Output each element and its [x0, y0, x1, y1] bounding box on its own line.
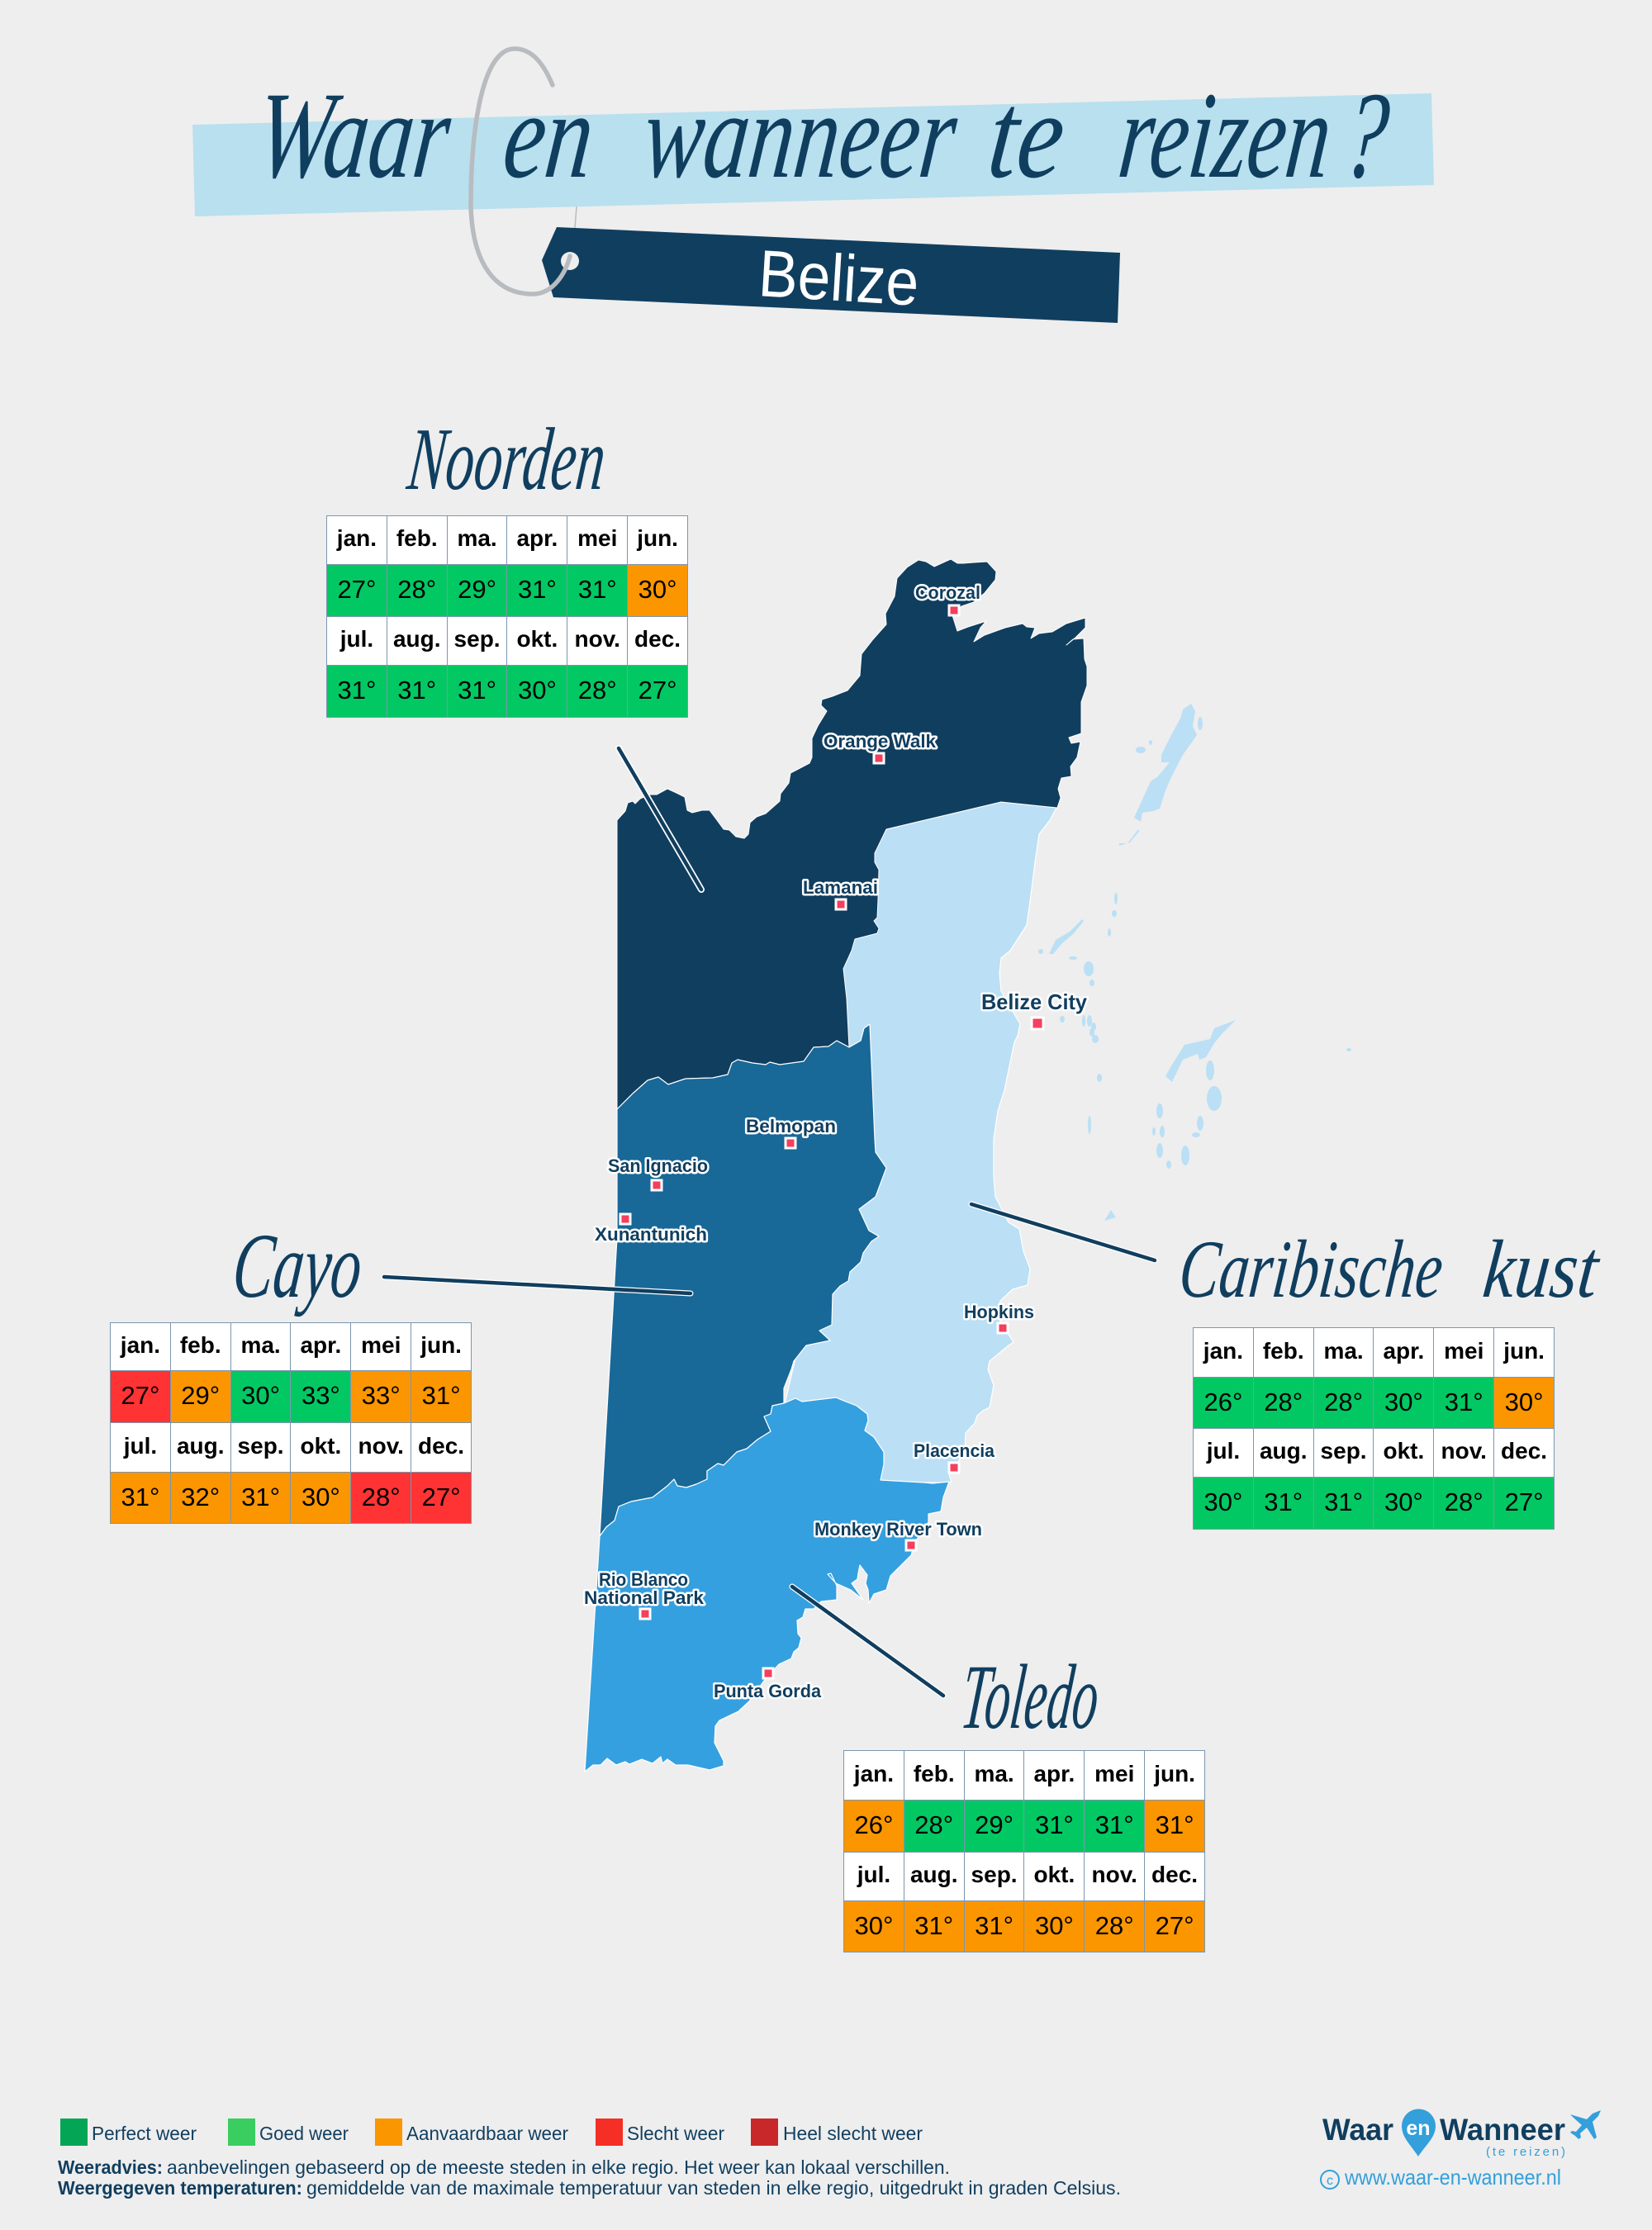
- table: Caribische kust: mei: [1444, 1338, 1483, 1363]
- table: Toledo: ma.: [974, 1761, 1014, 1786]
- table: Caribische kust: sep.: [1321, 1438, 1367, 1464]
- table: Toledo: jun.: [1154, 1761, 1195, 1786]
- table: Toledo: 27°: [1156, 1911, 1194, 1939]
- city: Monkey River Town: Monkey River Town: [814, 1519, 982, 1540]
- table: Caribische kust: 30°: [1384, 1388, 1423, 1416]
- table: Toledo: aug.: [910, 1862, 958, 1887]
- table: Toledo: 30°: [1035, 1911, 1074, 1939]
- table: Cayo: 29°: [181, 1381, 220, 1410]
- table: Noorden: jun.: [637, 525, 678, 551]
- table: Noorden: 27°: [337, 575, 376, 604]
- city: Lamanai: Lamanai: [803, 877, 878, 898]
- logo: Waar en Wanneer: en: [1406, 2117, 1431, 2140]
- city: San Ignacio: [608, 1155, 708, 1190]
- note: weeradvies: Weeradvies:: [58, 2156, 163, 2178]
- city: Orange Walk: Orange Walk: [824, 731, 937, 752]
- city: Corozal: Corozal: [915, 582, 980, 603]
- table: Noorden: okt.: [517, 626, 558, 652]
- table: Noorden: 30°: [518, 676, 557, 705]
- table: Caribische kust: 30°: [1384, 1487, 1423, 1516]
- table: Caribische kust: 30°: [1505, 1388, 1544, 1416]
- pointer: Caribische kust: [971, 1204, 1155, 1260]
- heading: Caribische kust: kust: [1479, 1223, 1604, 1315]
- table: Noorden: nov.: [574, 626, 620, 652]
- city: Xunantunich: [595, 1214, 707, 1245]
- heading: Toledo: Toledo: [957, 1646, 1104, 1748]
- table: Cayo: nov.: [358, 1432, 404, 1459]
- city: Belize City: Belize City: [981, 989, 1088, 1014]
- table: Noorden: aug.: [393, 626, 441, 652]
- table: Cayo: 27°: [422, 1482, 461, 1511]
- heading: Cayo: Cayo: [228, 1215, 367, 1317]
- table: Noorden: 31°: [337, 676, 376, 705]
- table: Cayo: jul.: [124, 1432, 157, 1459]
- city: Corozal: [915, 582, 980, 615]
- table: Cayo: 33°: [362, 1381, 401, 1410]
- table: Noorden: 27°: [638, 676, 677, 705]
- table: Noorden: ma.: [457, 525, 497, 551]
- title: Waar: [251, 66, 457, 204]
- table: Cayo: 28°: [362, 1482, 401, 1511]
- logo: Waar en Wanneer: (te reizen): [1486, 2145, 1565, 2159]
- table: Noorden: 31°: [458, 676, 496, 705]
- table: Caribische kust: 28°: [1264, 1388, 1303, 1416]
- table: Cayo: ma.: [240, 1331, 281, 1358]
- table: Toledo: dec.: [1151, 1862, 1198, 1887]
- pointer: Toledo: [792, 1587, 943, 1696]
- legend: [60, 2118, 923, 2146]
- table: Cayo: apr.: [300, 1331, 341, 1358]
- thin tag string: [575, 206, 577, 228]
- table: Noorden: 31°: [578, 575, 617, 604]
- legend: Slecht weer: [627, 2123, 724, 2144]
- table: Noorden: 31°: [397, 676, 436, 705]
- table: Caribische kust: apr.: [1383, 1338, 1424, 1363]
- table: Noorden: 31°: [518, 575, 557, 604]
- city: San Ignacio: San Ignacio: [608, 1155, 708, 1176]
- table: Cayo: 31°: [121, 1482, 159, 1511]
- table: Toledo: [843, 1750, 1205, 1952]
- table: Cayo: okt.: [301, 1432, 341, 1459]
- title: ?: [1338, 66, 1395, 204]
- table: Noorden: 28°: [397, 575, 436, 604]
- city: Placencia: [914, 1440, 995, 1473]
- table: Cayo: aug.: [177, 1432, 225, 1459]
- table: Caribische kust: 28°: [1324, 1388, 1363, 1416]
- logo: Waar en Wanneer: Waar: [1322, 2113, 1393, 2147]
- logo: Waar en Wanneer: [1322, 2109, 1601, 2159]
- table: Cayo: 27°: [121, 1381, 159, 1410]
- city: Monkey River Town: [814, 1519, 982, 1550]
- table: Cayo: 31°: [422, 1381, 461, 1410]
- table: Caribische kust: jun.: [1503, 1338, 1545, 1363]
- city: Punta Gorda: [714, 1668, 822, 1701]
- table: Toledo: feb.: [914, 1761, 955, 1786]
- table: Caribische kust: okt.: [1383, 1438, 1424, 1464]
- table: Toledo: 29°: [975, 1810, 1014, 1839]
- map: Caribische kust region: [785, 802, 1056, 1483]
- table: Toledo: mei: [1094, 1761, 1134, 1786]
- table: Toledo: 31°: [975, 1911, 1014, 1939]
- table: Noorden: 29°: [458, 575, 496, 604]
- city: Belize City: [981, 989, 1088, 1029]
- table: Toledo: okt.: [1034, 1862, 1075, 1887]
- table: Caribische kust: jul.: [1207, 1438, 1240, 1464]
- city: Rio Blanco National Park: National Park: [584, 1587, 705, 1608]
- table: Caribische kust: 27°: [1505, 1487, 1544, 1516]
- table: Noorden: apr.: [516, 525, 558, 551]
- table: Caribische kust: ma.: [1323, 1338, 1364, 1363]
- map: cayes and islands: [1038, 704, 1351, 1221]
- title: reizen: [1113, 66, 1338, 204]
- tag: Belize: [542, 227, 1120, 323]
- table: Cayo: 33°: [301, 1381, 340, 1410]
- map: Cayo region: [600, 1024, 886, 1536]
- table: Noorden: mei: [577, 525, 617, 551]
- city: Punta Gorda: Punta Gorda: [714, 1681, 822, 1701]
- city: Xunantunich: Xunantunich: [595, 1224, 707, 1245]
- table: Cayo: dec.: [418, 1432, 464, 1459]
- table: Noorden: jan.: [337, 525, 377, 551]
- table: Noorden: sep.: [454, 626, 501, 652]
- map: Toledo region: [585, 1397, 949, 1772]
- city: Hopkins: [964, 1302, 1034, 1333]
- table: Caribische kust: 31°: [1445, 1388, 1483, 1416]
- city: Placencia: Placencia: [914, 1440, 995, 1461]
- logo: Waar en Wanneer: Wanneer: [1440, 2113, 1565, 2147]
- table: Toledo: jan.: [854, 1761, 894, 1786]
- note: weergegeven temperaturen: Weergegeven temperaturen:: [58, 2177, 302, 2199]
- table: Caribische kust: nov.: [1441, 1438, 1487, 1464]
- city: Belmopan: [746, 1116, 836, 1148]
- note: weeradvies: aanbevelingen gebaseerd op de meeste steden in elke regio. Het weer kan lokaal verschillen.: [167, 2156, 950, 2178]
- legend: Heel slecht weer: [783, 2123, 923, 2144]
- table: Noorden: [326, 515, 688, 718]
- table: Toledo: 26°: [854, 1810, 893, 1839]
- city: Orange Walk: [824, 731, 937, 763]
- pointer: Noorden: [619, 748, 701, 890]
- table: Caribische kust: [1193, 1327, 1555, 1530]
- city: Belmopan: Belmopan: [746, 1116, 836, 1136]
- title banner: [192, 93, 1434, 216]
- table: Toledo: nov.: [1091, 1862, 1137, 1887]
- title: [251, 66, 1395, 204]
- city: Lamanai: [803, 877, 878, 909]
- legend: Aanvaardbaar weer: [406, 2123, 568, 2144]
- table: Toledo: 31°: [1035, 1810, 1074, 1839]
- table: Cayo: jun.: [420, 1331, 462, 1358]
- heading: Noorden: Noorden: [403, 410, 610, 509]
- table: Cayo: [110, 1322, 472, 1524]
- website: c: [1327, 2174, 1333, 2188]
- website: www.waar-en-wanneer.nl: [1344, 2165, 1561, 2190]
- table: Noorden: jul.: [340, 626, 373, 652]
- pointer: Cayo: [384, 1277, 691, 1293]
- table: Caribische kust: jan.: [1203, 1338, 1243, 1363]
- table: Toledo: 31°: [1156, 1810, 1194, 1839]
- city: Rio Blanco National Park: [584, 1569, 705, 1619]
- table: Cayo: 31°: [241, 1482, 280, 1511]
- heading: Caribische kust: Caribische: [1175, 1223, 1447, 1315]
- table: Toledo: 30°: [854, 1911, 893, 1939]
- table: Caribische kust: 31°: [1264, 1487, 1303, 1516]
- title: en: [498, 66, 601, 204]
- table: Cayo: 30°: [301, 1482, 340, 1511]
- table: Cayo: sep.: [238, 1432, 284, 1459]
- table: Noorden: feb.: [396, 525, 438, 551]
- table: Caribische kust: 31°: [1324, 1487, 1363, 1516]
- table: Cayo: feb.: [180, 1331, 221, 1358]
- legend: Goed weer: [259, 2123, 349, 2144]
- tag string loop: [471, 49, 570, 294]
- table: Cayo: jan.: [121, 1331, 160, 1358]
- table: Caribische kust: 28°: [1445, 1487, 1483, 1516]
- table: Cayo: mei: [361, 1331, 401, 1358]
- table: Caribische kust: 26°: [1203, 1388, 1242, 1416]
- table: Noorden: 30°: [638, 575, 677, 604]
- table: Noorden: 28°: [578, 676, 617, 705]
- city: Hopkins: Hopkins: [964, 1302, 1034, 1322]
- map: Noorden region: [617, 559, 1087, 1109]
- title: wanneer: [638, 66, 963, 204]
- legend: Perfect weer: [92, 2123, 197, 2144]
- table: Cayo: 30°: [241, 1381, 280, 1410]
- table: Caribische kust: feb.: [1263, 1338, 1304, 1363]
- table: Toledo: 28°: [914, 1810, 953, 1839]
- table: Toledo: jul.: [857, 1862, 890, 1887]
- table: Caribische kust: 30°: [1203, 1487, 1242, 1516]
- city: Rio Blanco National Park: Rio Blanco: [599, 1569, 688, 1590]
- table: Toledo: 31°: [914, 1911, 953, 1939]
- note: weergegeven temperaturen: gemiddelde van de maximale temperatuur van steden in elke regio, uitgedrukt in graden Celsius.: [306, 2177, 1121, 2199]
- table: Cayo: 32°: [181, 1482, 220, 1511]
- table: Toledo: 28°: [1095, 1911, 1134, 1939]
- table: Caribische kust: dec.: [1501, 1438, 1547, 1464]
- table: Noorden: dec.: [634, 626, 681, 652]
- table: Toledo: apr.: [1033, 1761, 1075, 1786]
- title: te: [983, 66, 1071, 204]
- tag: Belize: Belize: [757, 236, 921, 320]
- table: Toledo: sep.: [971, 1862, 1018, 1887]
- table: Caribische kust: aug.: [1260, 1438, 1308, 1464]
- table: Toledo: 31°: [1095, 1810, 1134, 1839]
